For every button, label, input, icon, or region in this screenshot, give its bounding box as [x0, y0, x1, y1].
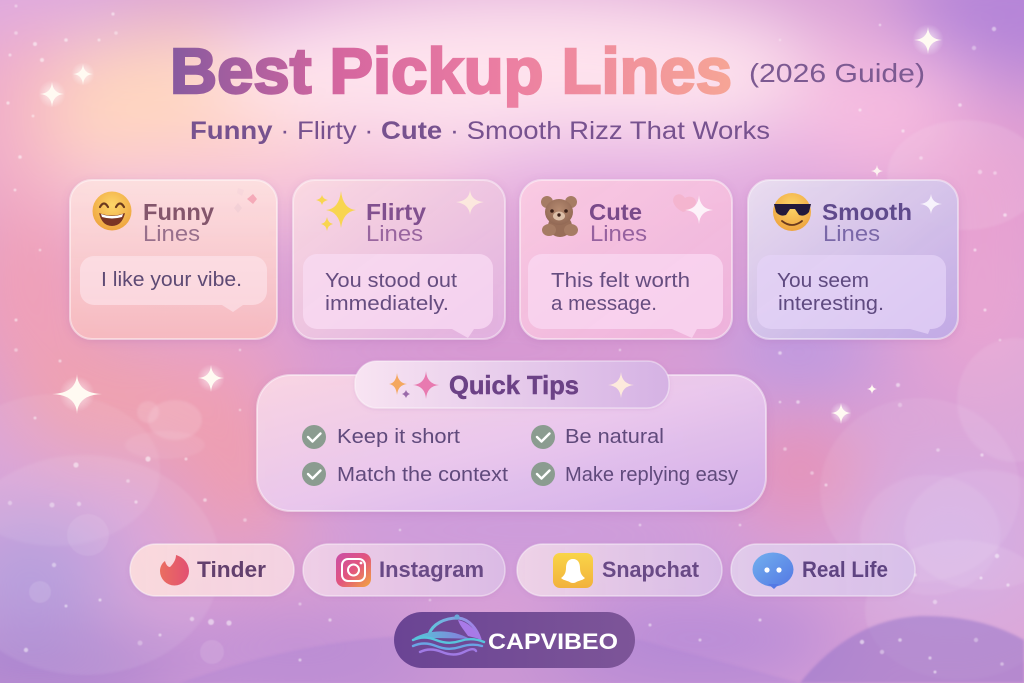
speech bubble: smooth: interesting. — [778, 293, 884, 315]
tip: be natural: Be natural — [565, 426, 664, 448]
panel: funny lines — [70, 180, 277, 339]
speech bubble: cute — [528, 254, 723, 338]
heading: flirty lines: Lines — [366, 221, 423, 246]
decoration: faded sparkle — [456, 190, 484, 215]
icon: sparkles — [316, 191, 356, 231]
title: Best Pickup Lines — [170, 35, 732, 107]
pill: real life — [731, 544, 915, 596]
pill: tinder — [130, 544, 294, 596]
heading text: Quick Tips — [449, 370, 579, 400]
heading: cute lines: Lines — [590, 221, 647, 246]
title year note: (2026 Guide) — [749, 58, 925, 88]
icon: cap and waves — [413, 614, 484, 654]
icon: teddy bear — [541, 196, 578, 237]
panel: smooth lines — [748, 180, 958, 339]
speech bubble: cute: a message. — [551, 293, 657, 315]
tip: keep it short — [302, 425, 460, 449]
decoration: sparkle — [920, 194, 942, 214]
heading: flirty lines — [366, 199, 426, 246]
heading: smooth lines: Smooth — [822, 199, 912, 225]
top right cloud — [887, 120, 1024, 230]
tip: match the context: Match the context — [337, 464, 508, 486]
label: Tinder — [197, 557, 266, 582]
label: Real Life — [802, 557, 888, 582]
heading: cute lines: Cute — [589, 199, 642, 225]
tip: keep it short: Keep it short — [337, 426, 460, 448]
decoration: heart and sparkle — [673, 194, 713, 224]
speech bubble: flirty: immediately. — [325, 293, 449, 315]
heading: funny lines: Lines — [143, 221, 200, 246]
icon: grinning face — [92, 192, 132, 230]
pill: snapchat — [517, 544, 722, 596]
decoration: pale sparkle — [608, 372, 634, 398]
speech bubble: smooth: You seem — [777, 270, 869, 292]
speech bubble: cute: This felt worth — [551, 270, 690, 292]
label: Instagram — [379, 557, 484, 582]
icon: tinder flame — [160, 555, 189, 586]
tip: be natural — [531, 425, 664, 449]
heading: smooth lines — [822, 199, 912, 246]
heading: funny lines: Funny — [143, 199, 214, 225]
decoration: faded hearts — [234, 188, 257, 213]
label: Snapchat — [602, 557, 700, 582]
icon: sunglasses face — [773, 193, 811, 231]
icon: chat bubble — [752, 552, 794, 589]
heading: funny lines — [143, 199, 214, 246]
right clouds — [957, 338, 1024, 462]
speech bubble: smooth — [757, 255, 946, 334]
icon: snapchat — [553, 553, 593, 588]
subtitle: Funny · Flirty · Cute · Smooth Rizz That Works — [190, 117, 770, 145]
panel: cute lines — [520, 180, 732, 339]
speech bubble: flirty — [303, 254, 493, 338]
panel: quick tips — [257, 361, 766, 511]
heading: flirty lines: Flirty — [366, 199, 426, 225]
wordmark: CAPVIBEO — [488, 629, 618, 654]
icon: instagram — [336, 553, 371, 587]
pill: instagram — [303, 544, 505, 596]
speech bubble: flirty: You stood out — [325, 270, 457, 292]
panel: flirty lines — [293, 180, 505, 339]
tip: make replying easy: Make replying easy — [565, 464, 738, 486]
speech bubble: funny: I like your vibe. — [101, 269, 242, 291]
sparkle glows — [38, 24, 944, 424]
speech bubble: funny — [80, 256, 267, 312]
logo: capvibeo — [394, 612, 635, 668]
heading: smooth lines: Lines — [823, 221, 880, 246]
quick tips heading pill — [355, 361, 669, 408]
icon: tips sparkles — [389, 371, 439, 399]
heading: cute lines — [589, 199, 647, 246]
